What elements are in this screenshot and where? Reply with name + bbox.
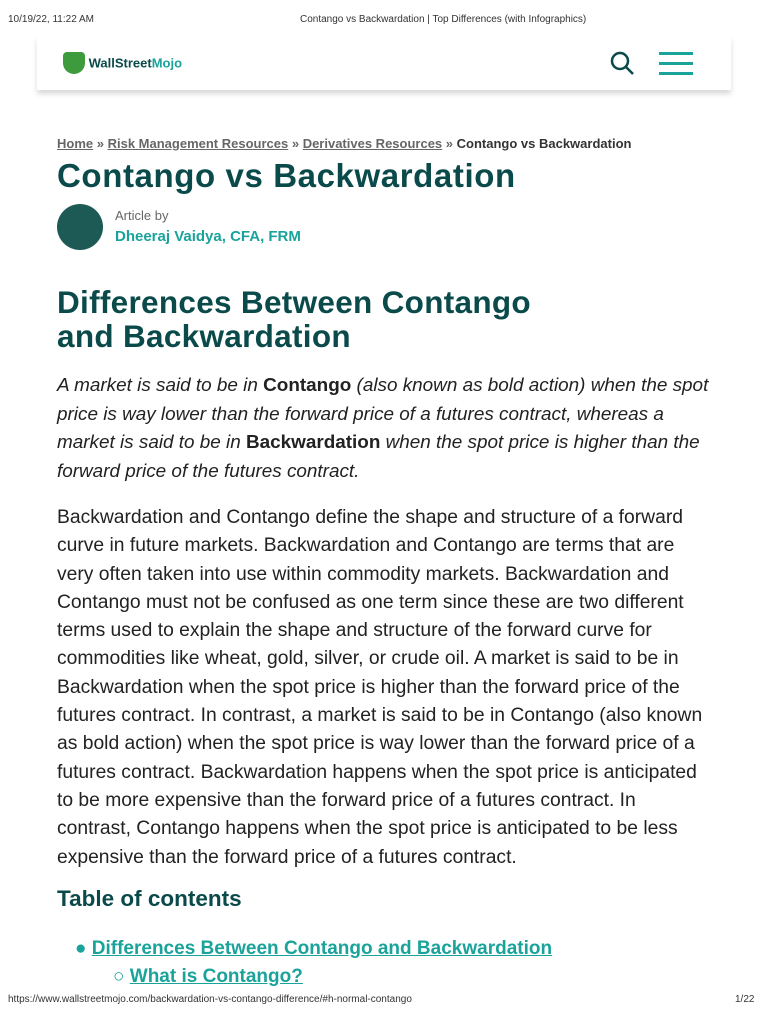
logo (63, 52, 182, 74)
intro italic paragraph: forward price of the futures contract. (57, 461, 359, 482)
body paragraph: futures contract. In contrast, a market is said to be in Contango (also known (57, 705, 702, 726)
body paragraph: to be more expensive than the forward price of a futures contract. In (57, 790, 636, 811)
body paragraph: as bold action) when the spot price is way lower than the forward price of a (57, 733, 695, 754)
breadcrumb: Home » Risk Management Resources » Derivatives Resources » Contango vs Backwardation (57, 136, 631, 151)
author: Dheeraj Vaidya, CFA, FRM (115, 228, 301, 245)
body paragraph: Contango must not be confused as one term since these are two different (57, 592, 684, 613)
toc list: ● Differences Between Contango and Backwardation (75, 938, 552, 959)
body paragraph: curve in future markets. Backwardation and Contango are terms that are (57, 535, 674, 556)
heading: table of contents: Table of contents (57, 886, 242, 911)
intro italic paragraph (56, 375, 709, 482)
icon: search (610, 52, 634, 75)
author: Article by (115, 208, 168, 223)
intro italic paragraph: market is said to be in Backwardation when the spot price is higher than the (57, 432, 700, 453)
navbar (37, 36, 731, 90)
body paragraph (57, 507, 702, 868)
print header (8, 14, 586, 25)
text: https://www.wallstreetmojo.com/backwardation-vs-contango-difference/#h-normal-contango (8, 994, 412, 1005)
logo: WallStreetMojo (89, 56, 182, 70)
body paragraph: contrast, Contango happens when the spot price is anticipated to be less (57, 818, 678, 839)
intro italic paragraph: price is way lower than the forward price of a futures contract, whereas a (57, 404, 664, 425)
heading: differences (57, 284, 531, 354)
heading: differences: Differences Between Contango (57, 284, 531, 320)
body paragraph: very often taken into use within commodity markets. Backwardation and (57, 564, 669, 585)
body paragraph: Backwardation when the spot price is higher than the forward price of the (57, 677, 680, 698)
title: Contango vs Backwardation (57, 157, 516, 194)
print header: Contango vs Backwardation | Top Differences (with Infographics) (300, 14, 586, 25)
heading: differences: and Backwardation (57, 318, 351, 354)
body paragraph: futures contract. Backwardation happens when the spot price is anticipated (57, 762, 697, 783)
icon: menu (659, 52, 693, 75)
author (57, 204, 301, 250)
print header: 10/19/22, 11:22 AM (8, 14, 94, 25)
toc list: ○ What is Contango? (113, 966, 303, 987)
text: 1/22 (735, 994, 754, 1005)
body paragraph: Backwardation and Contango define the shape and structure of a forward (57, 507, 683, 528)
intro italic paragraph: A market is said to be in Contango (also known as bold action) when the spot (57, 375, 708, 396)
print footer (8, 994, 754, 1005)
body paragraph: commodities like wheat, gold, silver, or crude oil. A market is said to be in (57, 648, 679, 669)
body paragraph: terms used to explain the shape and structure of the forward curve for (57, 620, 652, 641)
body paragraph: expensive than the forward price of a futures contract. (57, 847, 517, 868)
toc list (75, 938, 552, 987)
